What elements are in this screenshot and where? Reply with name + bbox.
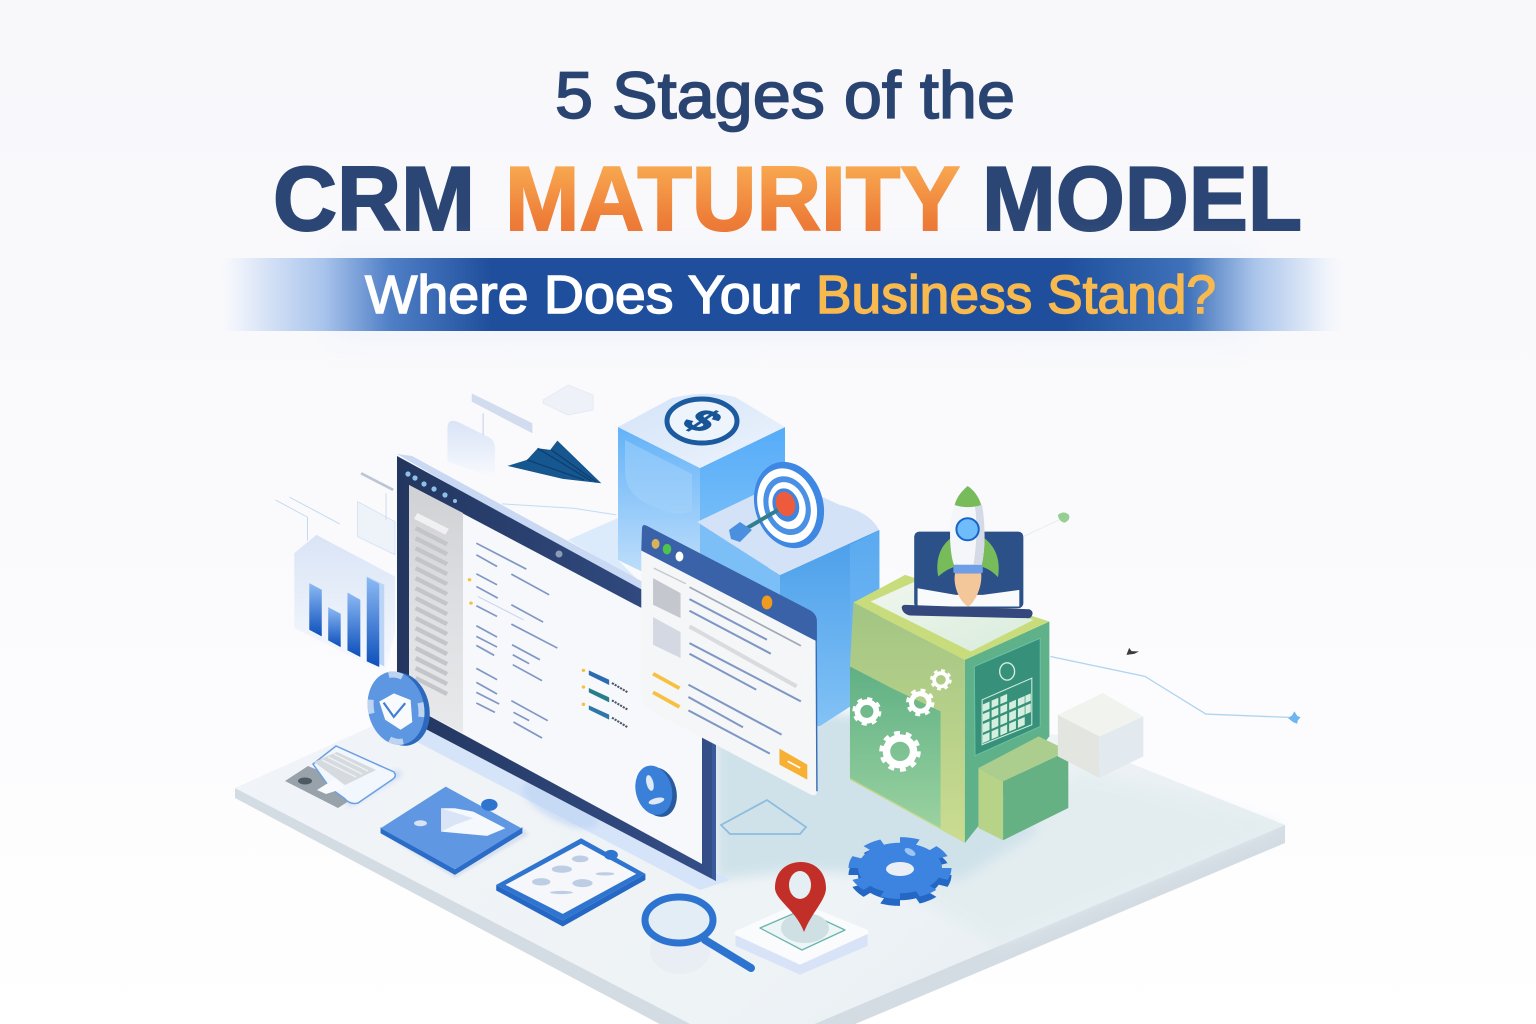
webcam <box>556 550 562 558</box>
sidebar <box>409 485 463 733</box>
subtitle banner <box>222 248 1344 340</box>
window button <box>779 749 807 780</box>
map pin icon <box>737 862 866 973</box>
paper plane <box>507 441 601 483</box>
chart bars <box>309 577 379 667</box>
title line two: MODEL <box>982 149 1302 250</box>
clipboard icon <box>285 746 402 808</box>
application window <box>641 525 817 795</box>
subtitle text: Business Stand? <box>816 265 1216 325</box>
blue cube with dollar <box>618 394 785 600</box>
blue cube with target <box>697 453 880 726</box>
title line two <box>273 149 1302 250</box>
floor triangle outline <box>721 800 806 834</box>
title line one: 5 Stages of the <box>555 58 1015 132</box>
calendar panel <box>974 638 1040 756</box>
title line two: CRM <box>273 149 475 250</box>
magnifying glass icon <box>645 897 751 974</box>
target <box>729 453 835 557</box>
dollar coin: $ <box>671 403 733 439</box>
screen legend <box>468 578 628 727</box>
background ghost icons <box>275 385 616 555</box>
monitor screen <box>409 485 702 864</box>
small dark speck <box>1126 648 1139 655</box>
green server block <box>850 486 1068 843</box>
monitor toolbar dots <box>405 471 457 503</box>
gears <box>854 670 950 770</box>
subtitle text: Where Does Your <box>365 265 800 325</box>
small white cube <box>1058 693 1143 778</box>
floating leaf dot <box>1023 520 1059 537</box>
title <box>273 58 1302 250</box>
monitor <box>397 454 722 881</box>
subtitle text <box>365 265 1216 325</box>
blue gear icon <box>856 842 944 901</box>
window controls <box>652 539 772 609</box>
isometric illustration <box>235 385 1301 1024</box>
title line two: MATURITY <box>505 149 960 250</box>
checklist clipboard icon <box>496 838 645 926</box>
small green cube <box>978 736 1068 840</box>
window text lines <box>653 568 801 754</box>
connector line with star <box>1023 512 1301 724</box>
platform <box>235 518 1285 1024</box>
laptop with rocket <box>902 486 1033 618</box>
screen text lines <box>476 543 557 738</box>
blue envelope folder icon <box>381 787 528 878</box>
window thumbnails <box>653 578 681 658</box>
clock badge <box>361 665 436 752</box>
rocket <box>937 486 999 607</box>
screen badge <box>630 761 682 822</box>
bar chart card <box>294 535 395 673</box>
